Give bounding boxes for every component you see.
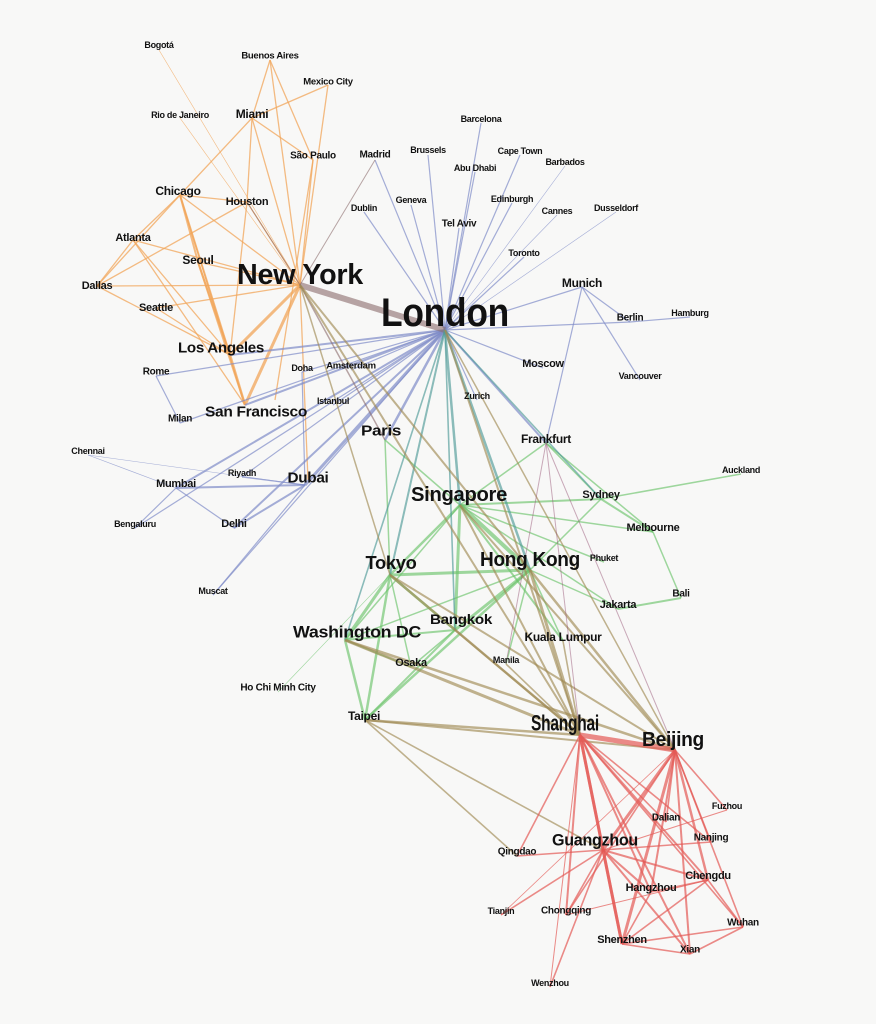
label: Taipei: Taipei: [348, 709, 380, 723]
label: Brussels: Brussels: [410, 145, 446, 155]
edges: NY-London trunk: [247, 160, 445, 440]
label: Milan: Milan: [168, 414, 192, 424]
label: Xian: Xian: [680, 944, 700, 956]
label: Istanbul: Istanbul: [317, 396, 349, 406]
label: Zurich: Zurich: [464, 391, 490, 401]
label: Atlanta: Atlanta: [115, 232, 152, 244]
label: London: London: [381, 291, 509, 335]
label: Bogotá: Bogotá: [144, 40, 175, 50]
label: Mumbai: Mumbai: [156, 478, 196, 490]
label: Singapore: Singapore: [411, 484, 507, 506]
label: Shanghai: Shanghai: [531, 710, 599, 736]
label: Delhi: Delhi: [221, 518, 247, 530]
edges: green/teal Asia-Pacific: [278, 440, 741, 720]
label: Bengaluru: Bengaluru: [114, 519, 156, 529]
label: Phuket: Phuket: [590, 553, 618, 563]
label: Tokyo: Tokyo: [366, 553, 417, 573]
label: Madrid: Madrid: [360, 150, 391, 160]
label: Muscat: Muscat: [198, 586, 228, 596]
label: Hong Kong: Hong Kong: [480, 549, 580, 571]
label: Seattle: Seattle: [139, 302, 173, 314]
label: Buenos Aires: Buenos Aires: [241, 50, 299, 62]
label: Washington DC: Washington DC: [293, 622, 421, 642]
label: Wenzhou: Wenzhou: [531, 978, 569, 988]
label: Nanjing: Nanjing: [694, 832, 728, 844]
label: Seoul: Seoul: [182, 253, 214, 267]
label: Fuzhou: Fuzhou: [712, 801, 742, 811]
edges: red China cluster: [501, 735, 743, 987]
label: Beijing: Beijing: [642, 729, 704, 751]
label: Cannes: Cannes: [542, 206, 573, 216]
edges: olive China-world links: [300, 285, 675, 856]
label: Chengdu: Chengdu: [685, 870, 731, 882]
label: Melbourne: Melbourne: [627, 522, 680, 534]
label: Vancouver: Vancouver: [619, 371, 662, 381]
label: San Francisco: San Francisco: [205, 404, 307, 420]
label: Cape Town: Cape Town: [498, 146, 542, 156]
label: Miami: Miami: [236, 107, 268, 121]
label: Bali: Bali: [672, 588, 690, 600]
edges: blue London cluster: [88, 123, 690, 595]
label: Chongqing: Chongqing: [541, 906, 591, 916]
label: Dallas: Dallas: [82, 280, 112, 292]
label: Hamburg: Hamburg: [671, 308, 709, 318]
label: Paris: Paris: [361, 422, 401, 440]
label: Tianjin: Tianjin: [488, 906, 514, 916]
label: Dalian: Dalian: [652, 812, 680, 824]
label: Edinburgh: Edinburgh: [491, 194, 533, 204]
label: Qingdao: Qingdao: [498, 846, 536, 858]
label: Abu Dhabi: Abu Dhabi: [454, 163, 496, 173]
label: Manila: Manila: [493, 655, 520, 665]
label: Los Angeles: Los Angeles: [178, 340, 264, 356]
label: Shenzhen: Shenzhen: [597, 934, 647, 946]
label: Bangkok: Bangkok: [430, 611, 493, 627]
label: Ho Chi Minh City: Ho Chi Minh City: [240, 682, 316, 694]
label: Sydney: Sydney: [582, 489, 621, 501]
label: Wuhan: Wuhan: [727, 918, 759, 928]
edges: orange Americas cluster: [97, 50, 328, 480]
label: Amsterdam: Amsterdam: [326, 360, 376, 372]
label: New York: New York: [237, 259, 364, 291]
label: Houston: Houston: [226, 196, 269, 208]
label: Mexico City: Mexico City: [303, 76, 354, 88]
label: Kuala Lumpur: Kuala Lumpur: [524, 630, 602, 644]
label: Barbados: Barbados: [545, 157, 585, 167]
label: Tel Aviv: Tel Aviv: [442, 218, 477, 230]
label: Riyadh: Riyadh: [228, 468, 256, 478]
label: Dublin: Dublin: [351, 203, 377, 213]
label: Moscow: Moscow: [522, 358, 565, 370]
label: Jakarta: Jakarta: [600, 599, 637, 611]
label: São Paulo: São Paulo: [290, 150, 336, 162]
label: Barcelona: Barcelona: [461, 114, 503, 124]
label: Osaka: Osaka: [395, 657, 428, 669]
label: Geneva: Geneva: [396, 195, 428, 205]
label: Guangzhou: Guangzhou: [552, 830, 638, 850]
label: Chennai: Chennai: [71, 446, 105, 456]
labels: [71, 40, 760, 988]
label: Rome: Rome: [143, 366, 170, 378]
label: Hangzhou: Hangzhou: [626, 882, 676, 894]
label: Berlin: Berlin: [617, 312, 643, 324]
label: Dubai: Dubai: [288, 470, 329, 486]
label: Munich: Munich: [562, 276, 602, 290]
label: Dusseldorf: Dusseldorf: [594, 203, 639, 213]
label: Frankfurt: Frankfurt: [521, 432, 571, 446]
label: Chicago: Chicago: [155, 184, 201, 198]
label: Toronto: Toronto: [508, 248, 540, 258]
label: Rio de Janeiro: Rio de Janeiro: [151, 110, 210, 120]
label: Auckland: Auckland: [722, 465, 760, 475]
label: Doha: Doha: [291, 363, 314, 373]
